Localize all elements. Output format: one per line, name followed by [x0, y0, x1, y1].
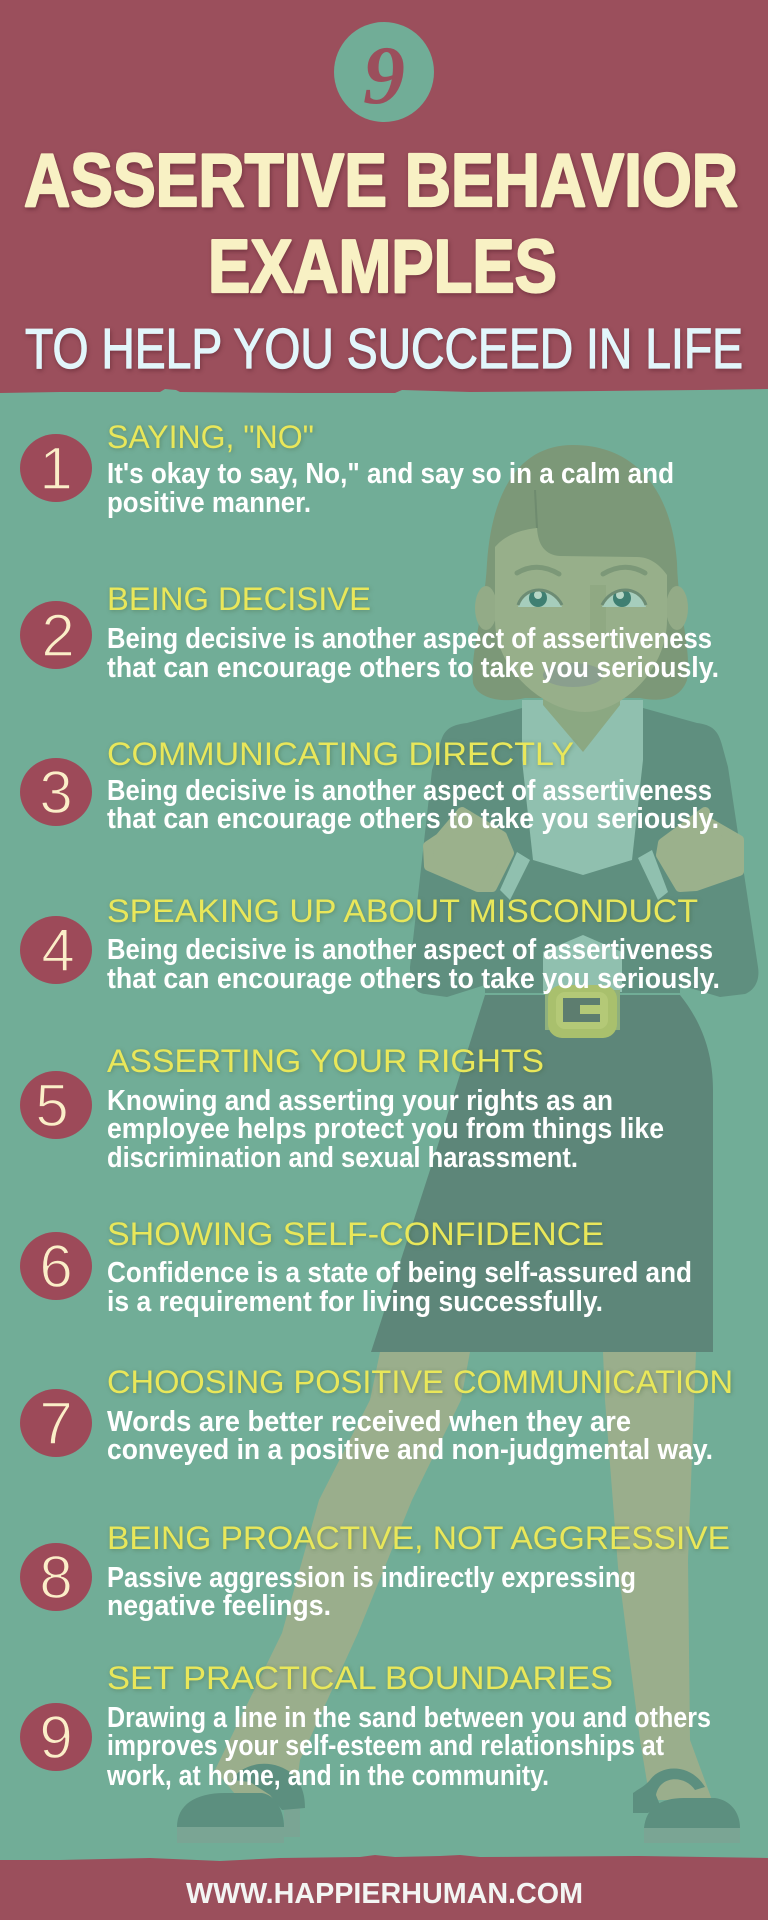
- text 5: [107, 1085, 664, 1174]
- right shoe: [633, 1768, 740, 1843]
- heading 7: CHOOSING POSITIVE COMMUNICATION: [107, 1364, 733, 1400]
- text 2: that can encourage others to take you seriously.: [107, 652, 719, 684]
- number badge 1: [20, 434, 92, 502]
- text 7: [107, 1406, 713, 1466]
- item 2: [20, 581, 719, 684]
- number badge 2: 2: [41, 602, 75, 669]
- header: [24, 22, 743, 381]
- ears: [475, 586, 688, 630]
- text 7: conveyed in a positive and non-judgmental way.: [107, 1434, 713, 1466]
- text 9: [106, 1702, 711, 1792]
- text 8: [107, 1562, 636, 1622]
- number badge 5: [20, 1071, 92, 1139]
- lips: [543, 663, 603, 687]
- right hand and cuff: [638, 812, 739, 900]
- jacket: [410, 708, 758, 997]
- left shoe: [177, 1764, 305, 1843]
- blouse: [522, 700, 643, 875]
- left hand and cuff: [428, 812, 530, 900]
- badge: number nine: [334, 22, 434, 122]
- item 8: [20, 1520, 730, 1622]
- eyes and brows: [517, 567, 646, 607]
- number badge 4: 4: [41, 917, 75, 984]
- lower shirt panel: [543, 935, 622, 992]
- number badge 8: [20, 1543, 92, 1611]
- number badge 7: 7: [39, 1390, 73, 1457]
- footer website: WWW.HAPPIERHUMAN.COM: [186, 1878, 583, 1910]
- text 3: [107, 775, 719, 835]
- text 9: improves your self-esteem and relationships at: [107, 1730, 664, 1762]
- text 6: is a requirement for living successfully.: [107, 1286, 603, 1318]
- number badge 4: [20, 916, 92, 984]
- heading 2: BEING DECISIVE: [107, 581, 371, 617]
- number badge 3: 3: [39, 759, 73, 826]
- item 3: [20, 736, 719, 835]
- item 1: [20, 419, 674, 519]
- text 5: discrimination and sexual harassment.: [107, 1142, 578, 1174]
- text 3: that can encourage others to take you seriously.: [107, 803, 719, 835]
- heading 5: ASSERTING YOUR RIGHTS: [107, 1043, 544, 1079]
- text 1: [107, 458, 674, 519]
- item 4: [20, 893, 720, 995]
- item 7: [20, 1364, 733, 1466]
- face: [495, 528, 667, 712]
- illustration: woman in suit: [177, 445, 758, 1843]
- title: [24, 138, 738, 308]
- item 6: [20, 1216, 692, 1318]
- number badge 2: [20, 601, 92, 669]
- panel: green content background: [0, 389, 768, 1861]
- title: EXAMPLES: [208, 224, 557, 308]
- text 6: Confidence is a state of being self-assured and: [107, 1257, 692, 1289]
- number badge 7: [20, 1389, 92, 1457]
- legs: [215, 1352, 712, 1805]
- text 5: employee helps protect you from things like: [107, 1113, 664, 1145]
- item 5: [20, 1043, 664, 1174]
- badge: number nine: 9: [363, 29, 405, 122]
- text 8: negative feelings.: [107, 1590, 331, 1622]
- hair back: [473, 445, 688, 700]
- text 8: Passive aggression is indirectly expressing: [107, 1562, 636, 1594]
- text 4: [107, 934, 720, 995]
- heading 1: SAYING, "NO": [107, 419, 314, 455]
- skirt: [371, 995, 713, 1352]
- heading 3: COMMUNICATING DIRECTLY: [107, 736, 574, 772]
- nose shading: [590, 585, 606, 640]
- number badge 5: 5: [35, 1072, 69, 1139]
- text 1: It's okay to say, No," and say so in a calm and: [107, 458, 674, 490]
- text 7: Words are better received when they are: [107, 1406, 631, 1438]
- number badge 6: [20, 1232, 92, 1300]
- number badge 8: 8: [39, 1544, 73, 1611]
- text 9: work, at home, and in the community.: [106, 1760, 549, 1792]
- heading 9: SET PRACTICAL BOUNDARIES: [107, 1660, 613, 1696]
- number badge 9: 9: [39, 1704, 73, 1771]
- hair parting line: [535, 490, 537, 528]
- text 6: [107, 1257, 692, 1318]
- text 1: positive manner.: [107, 487, 311, 519]
- text 2: [107, 623, 719, 684]
- belt buckle: [545, 985, 620, 1038]
- heading 4: SPEAKING UP ABOUT MISCONDUCT: [107, 893, 698, 929]
- number badge 3: [20, 758, 92, 826]
- number badge 6: 6: [39, 1233, 73, 1300]
- number badge 9: [20, 1703, 92, 1771]
- text 5: Knowing and asserting your rights as an: [107, 1085, 613, 1117]
- text 4: that can encourage others to take you seriously.: [107, 963, 720, 995]
- neck: [543, 695, 620, 752]
- item 9: [20, 1660, 711, 1792]
- number badge 1: 1: [39, 435, 73, 502]
- heading 8: BEING PROACTIVE, NOT AGGRESSIVE: [107, 1520, 730, 1556]
- heading 6: SHOWING SELF-CONFIDENCE: [107, 1216, 604, 1252]
